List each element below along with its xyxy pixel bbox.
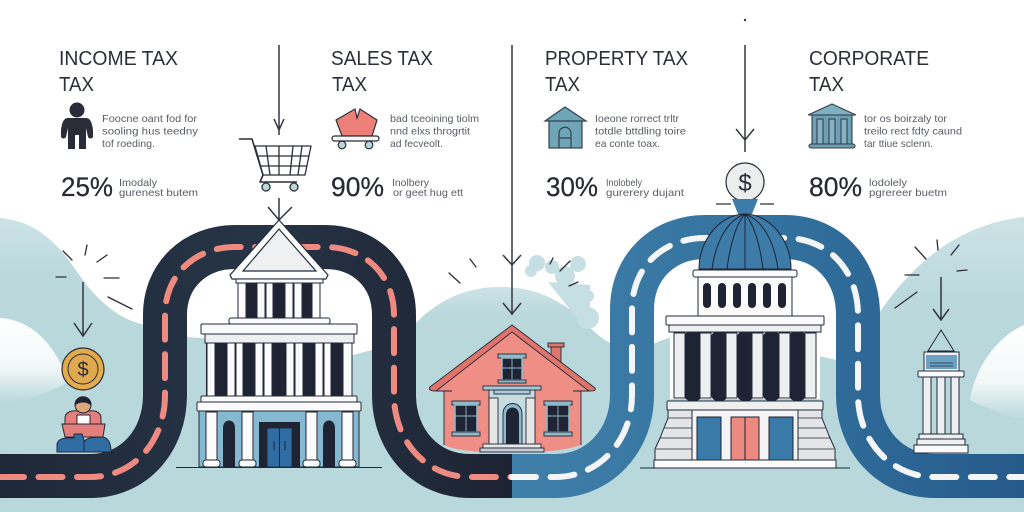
capitol drum	[693, 270, 797, 316]
building: tiered bank	[176, 220, 382, 468]
description: property tax	[595, 113, 686, 150]
description: corporate tax: tar ttiue sclenn.	[864, 138, 933, 150]
description: income tax	[102, 113, 199, 150]
description: sales tax	[390, 113, 479, 150]
stat: 80%: 80%	[809, 172, 862, 202]
bank ground floor	[176, 396, 382, 468]
panel: corporate tax	[808, 48, 962, 202]
bank entablature	[201, 318, 357, 343]
heading: property tax: PROPERTY TAX	[545, 48, 688, 70]
monument sign	[924, 352, 959, 371]
decorative dot	[744, 19, 746, 21]
description: corporate tax	[864, 113, 962, 150]
icon: shopping cart	[239, 139, 311, 191]
capitol dollar coin: $	[738, 170, 752, 197]
capitol colonnade	[666, 316, 824, 401]
icon: small house	[545, 107, 586, 148]
heading: corporate tax: CORPORATE	[809, 48, 929, 70]
heading: income tax: TAX	[59, 74, 94, 96]
capitol stairs	[655, 410, 835, 460]
heading: property tax	[545, 48, 688, 96]
icon: person at laptop	[57, 397, 111, 452]
stat label: corporate tax: lodolely	[869, 177, 908, 189]
background hills	[0, 217, 1024, 512]
description: corporate tax: tor os boirzaly tor	[864, 113, 948, 125]
house left window	[452, 401, 480, 436]
house dormer window	[498, 354, 526, 383]
monument hanger	[928, 330, 954, 351]
stat label: property tax	[606, 177, 684, 199]
bank upper colonnade	[238, 283, 320, 318]
stat label: property tax: gurerery dujant	[606, 187, 684, 199]
icon: gold dollar coin: $	[77, 359, 89, 381]
heading: corporate tax: TAX	[809, 74, 844, 96]
capitol dollar coin	[726, 163, 764, 201]
stat: 25%: 25%	[61, 172, 113, 202]
description: property tax: totdle bttdling toire	[595, 126, 686, 138]
description: property tax: Ioeone rorrect trltr	[595, 113, 679, 125]
description: sales tax: ad fecveolt.	[390, 138, 443, 150]
icon: person	[61, 102, 93, 149]
arrow: cart to bank	[268, 198, 292, 220]
road: blue section	[512, 237, 1024, 477]
description: income tax: tof roeding.	[102, 138, 155, 150]
monument steps	[914, 434, 968, 453]
house walls edge	[436, 391, 589, 445]
description: income tax: Foocne oant fod for	[102, 113, 198, 125]
description: corporate tax: treilo rect fdty caund	[864, 126, 962, 138]
arrow: long arrow to house	[503, 45, 521, 315]
arrow: into monument	[933, 277, 949, 320]
heading: income tax	[59, 48, 178, 96]
house porch and door	[480, 386, 544, 452]
icon: small bank	[808, 104, 856, 148]
heading: income tax: INCOME TAX	[59, 48, 178, 70]
bank middle colonnade	[206, 343, 352, 396]
description: property tax: ea conte toax.	[595, 138, 660, 150]
stat label: income tax	[119, 177, 198, 199]
bank pediment	[230, 220, 328, 283]
spark lines	[56, 240, 967, 309]
arrow: into shopping cart	[274, 45, 284, 135]
capitol finial	[716, 199, 774, 214]
stat label: sales tax: Inolbery	[392, 177, 430, 189]
road: dark section	[0, 247, 513, 477]
panel: sales tax	[331, 48, 479, 202]
stat label: property tax: Inolobely	[606, 177, 643, 189]
house chimney	[548, 343, 564, 370]
arrow: into gold coin	[74, 282, 92, 336]
description: income tax: sooling hus teedny	[102, 126, 199, 138]
stat label: sales tax: or geet hug ett	[393, 187, 463, 199]
heading: sales tax	[331, 48, 433, 96]
stat label: corporate tax: pgrereer buetm	[869, 187, 947, 199]
icon: sales basket	[332, 109, 379, 149]
capitol dome	[699, 214, 791, 269]
heading: corporate tax	[809, 48, 929, 96]
building: domed capitol	[640, 163, 850, 468]
stat label: income tax: gurenest butem	[119, 187, 198, 199]
description: sales tax: nnd elxs throgrtit	[390, 126, 470, 138]
capitol ground floor	[640, 401, 850, 468]
stat label: income tax: Imodaly	[119, 177, 158, 189]
stat: 90%: 90%	[331, 172, 384, 202]
house body	[436, 332, 589, 452]
building: red house	[429, 325, 595, 452]
description: sales tax: bad tceoining tiolm	[390, 113, 479, 125]
house roof	[429, 325, 595, 391]
panel: income tax	[59, 48, 199, 202]
building: small monument	[914, 330, 968, 453]
house right window	[544, 401, 572, 436]
stat label: sales tax	[392, 177, 463, 199]
heading: sales tax: TAX	[332, 74, 367, 96]
tree silhouette	[525, 255, 599, 330]
stat: 30%: 30%	[546, 172, 598, 202]
heading: sales tax: SALES TAX	[331, 48, 433, 70]
stat label: corporate tax	[869, 177, 947, 199]
monument columns	[918, 371, 964, 434]
arrow: into dollar coin	[736, 45, 754, 152]
heading: property tax: TAX	[545, 74, 580, 96]
icon: gold dollar coin	[62, 348, 104, 390]
panel: property tax	[545, 48, 688, 202]
